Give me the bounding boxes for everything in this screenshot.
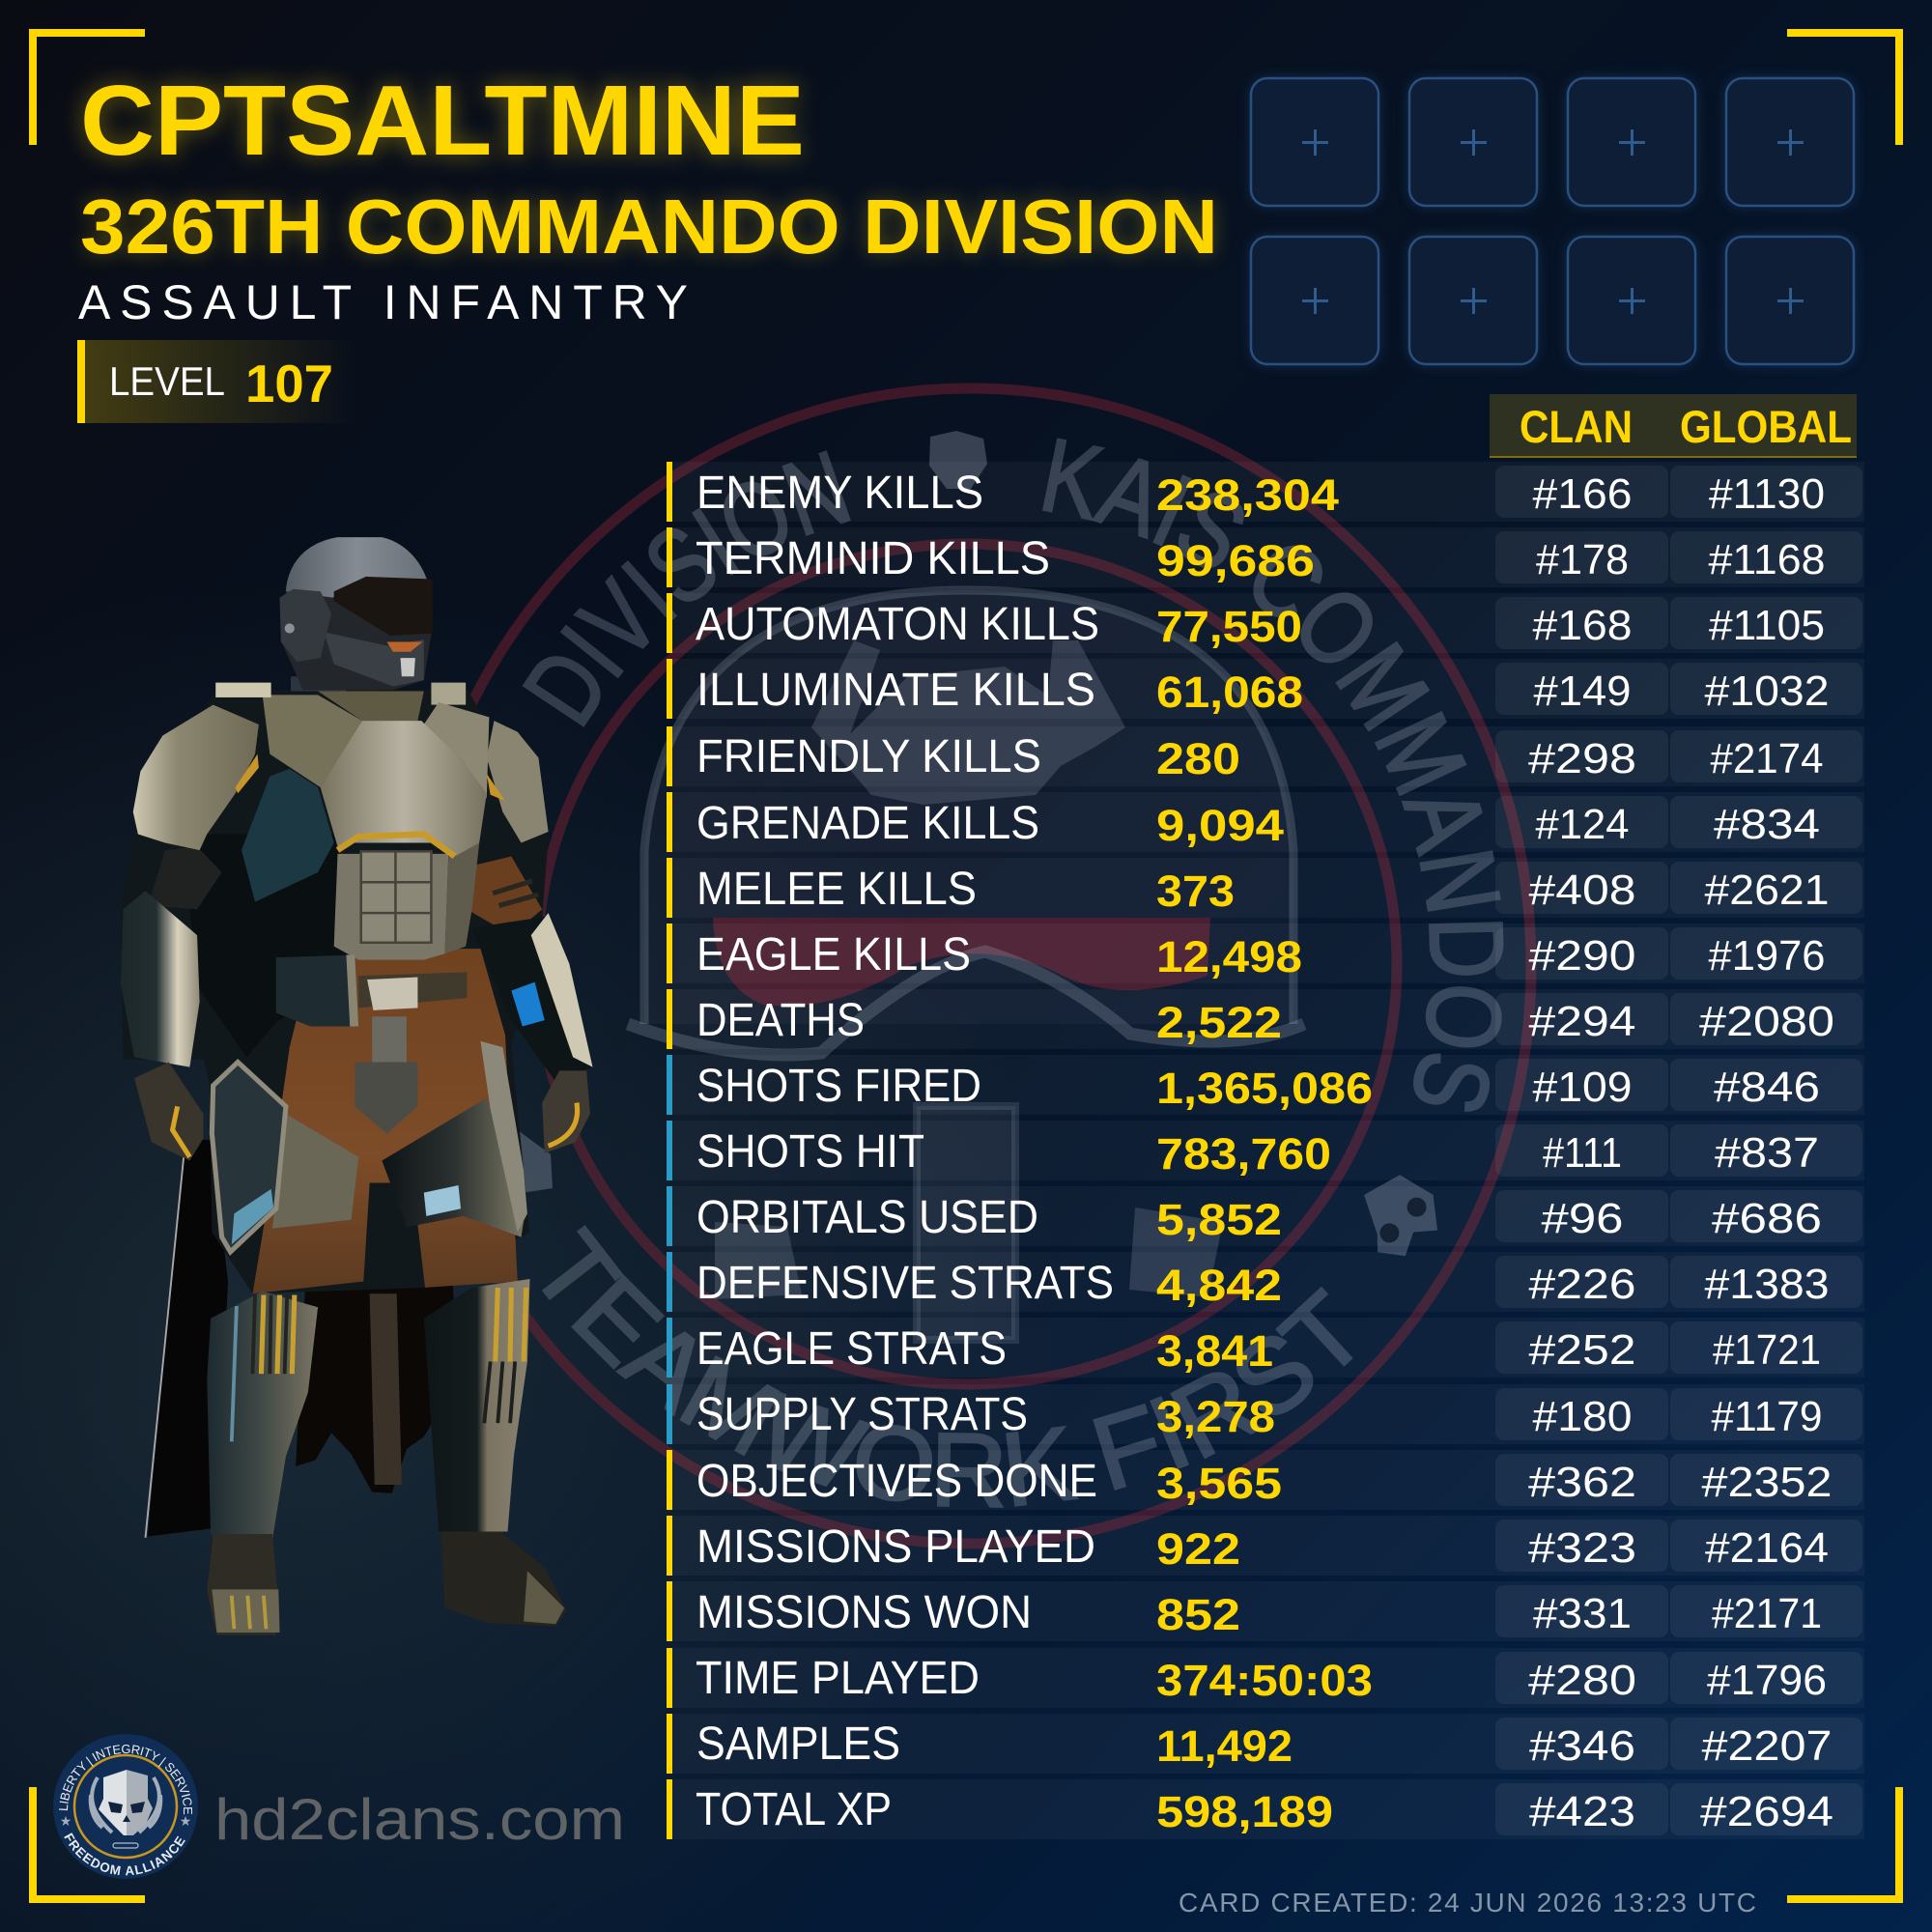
row: shots fired: #109 [1532,1064,1633,1111]
table header: rank columns: CLAN [1520,401,1633,452]
row: total xp: #2694 [1700,1788,1833,1835]
watermark emblem: clan patch [470,383,1536,1549]
row: time played [667,1648,1864,1708]
row: defensive strats [667,1252,1864,1312]
left arm [121,846,222,1161]
row: defensive strats: 4,842 [1156,1261,1282,1310]
logo name: FREEDOM ALLIANCE [64,1833,185,1876]
row: shots hit: SHOTS HIT [696,1126,924,1178]
right boot [441,1531,567,1627]
row: melee kills [667,858,1864,918]
row: orbitals used: #96 [1542,1195,1623,1242]
row: deaths: #294 [1528,998,1636,1045]
level badge [77,340,357,423]
row: deaths [667,989,1864,1049]
row: shots fired: 1,365,086 [1156,1064,1373,1113]
left thigh armor [212,1062,358,1252]
row: grenade kills: #124 [1536,801,1629,848]
row: shots hit: #111 [1543,1129,1622,1177]
row: enemy kills: ENEMY KILLS [696,468,983,519]
row: supply strats: #1179 [1712,1393,1822,1440]
body silhouette base [121,690,549,1293]
row: objectives done [667,1450,1864,1510]
row: shots hit: #837 [1715,1129,1819,1177]
row: missions played [667,1516,1864,1576]
row: missions played: MISSIONS PLAYED [696,1521,1095,1573]
logo motto: LIBERTY | INTEGRITY | SERVICE [59,1745,192,1814]
row: eagle strats: #252 [1528,1326,1636,1374]
row: total xp [667,1779,1864,1839]
row: melee kills: #2621 [1704,867,1830,914]
row: total xp: 598,189 [1156,1787,1333,1836]
table header: rank columns [1490,394,1857,458]
row: missions played: #323 [1528,1524,1636,1572]
row: supply strats [667,1384,1864,1444]
slot 1 [1251,78,1378,206]
row: missions won [667,1581,1864,1641]
row: orbitals used [667,1186,1864,1246]
helmet [280,537,433,692]
level badge: 107 [245,354,333,413]
row: samples: SAMPLES [696,1719,900,1770]
row: illuminate kills: #149 [1534,668,1631,715]
logo star right: ★ [180,1813,191,1829]
row: eagle strats: EAGLE STRATS [696,1323,1007,1375]
slot 5 [1251,237,1378,364]
cape [146,1140,458,1538]
row: friendly kills: #298 [1528,735,1636,782]
row: terminid kills [667,527,1864,587]
row: orbitals used: #686 [1712,1195,1822,1242]
row: deaths: 2,522 [1156,998,1282,1047]
watermark emblem: clan patch: TEAMWORK FIRST [542,1225,1352,1508]
row: samples [667,1714,1864,1774]
row: time played: #280 [1528,1657,1636,1704]
row: samples: #2207 [1702,1722,1832,1770]
slot 3 [1568,78,1695,206]
row: terminid kills: #1168 [1708,536,1826,583]
row: melee kills: #408 [1528,867,1636,914]
corner bracket: top right [1787,29,1903,145]
right arm [467,856,593,1153]
row: objectives done: OBJECTIVES DONE [696,1456,1097,1507]
row: orbitals used: 5,852 [1156,1195,1282,1244]
row: melee kills: 373 [1156,867,1235,916]
row: automaton kills: #168 [1532,602,1633,649]
belt with pouch and buckle [276,955,467,1026]
logo skull [99,1770,153,1835]
row: enemy kills: #1130 [1709,470,1825,518]
slot 8 [1726,237,1854,364]
watermark emblem: clan patch: KAIS COMMANDOS [1042,439,1503,1112]
website url: hd2clans.com [214,1787,625,1852]
row: eagle kills: EAGLE KILLS [696,929,971,980]
shoulder armor left [133,705,259,850]
watermark emblem: clan patch: DIVISION [522,450,851,727]
row: automaton kills [667,593,1864,653]
row: shots fired: #846 [1714,1064,1820,1111]
row: time played: TIME PLAYED [696,1653,980,1704]
slots grid: empty loadout slots [1251,78,1854,364]
corner bracket: bottom left [29,1787,145,1903]
row: illuminate kills [667,659,1864,719]
row: terminid kills: #178 [1536,536,1629,583]
slot 6 [1409,237,1537,364]
row: samples: 11,492 [1156,1721,1293,1771]
row: missions won: MISSIONS WON [696,1587,1032,1638]
row: friendly kills: 280 [1156,734,1240,783]
row: samples: #346 [1529,1722,1635,1770]
row: friendly kills: FRIENDLY KILLS [696,731,1041,782]
row: deaths: #2080 [1699,998,1834,1045]
row: terminid kills: TERMINID KILLS [696,533,1050,584]
row: automaton kills: AUTOMATON KILLS [696,599,1099,650]
row: grenade kills: GRENADE KILLS [696,798,1039,849]
slot 2 [1409,78,1537,206]
left shin guard [207,1292,318,1540]
row: grenade kills: #834 [1714,801,1820,848]
row: defensive strats: #1383 [1704,1261,1830,1308]
row: eagle strats [667,1318,1864,1378]
row: orbitals used: ORBITALS USED [696,1192,1038,1243]
chest armor [215,683,489,960]
row: supply strats: 3,278 [1156,1392,1275,1441]
row: eagle strats: #1721 [1713,1326,1821,1374]
row: shots fired [667,1055,1864,1115]
shoulder armor right [487,721,549,842]
row: eagle kills: #1976 [1708,932,1826,980]
row: melee kills: MELEE KILLS [696,864,977,915]
row: enemy kills [667,462,1864,522]
corner bracket: top left [29,29,145,145]
row: terminid kills: 99,686 [1156,536,1315,585]
row: total xp: #423 [1529,1788,1635,1835]
groin plate [355,1016,417,1133]
row: supply strats: #180 [1532,1393,1633,1440]
slot 4 [1726,78,1854,206]
subheading: role: ASSAULT INFANTRY [78,275,688,329]
row: missions won: #2171 [1712,1590,1822,1637]
row: grenade kills [667,792,1864,852]
row: enemy kills: #166 [1532,470,1633,518]
level badge: LEVEL [109,358,225,404]
row: grenade kills: 9,094 [1156,801,1284,850]
row: illuminate kills: 61,068 [1156,668,1303,717]
row: eagle kills: 12,498 [1156,932,1302,981]
row: eagle kills: #290 [1528,932,1636,980]
row: friendly kills [667,726,1864,786]
legs and pelvis cloth [252,949,518,1293]
title: player name: CPTSALTMINE [80,65,805,176]
row: missions played: #2164 [1705,1524,1829,1572]
logo laurels [91,1777,160,1833]
row: friendly kills: #2174 [1710,735,1824,782]
row: objectives done: #2352 [1702,1459,1832,1506]
row: eagle kills [667,923,1864,983]
row: automaton kills: #1105 [1709,602,1825,649]
row: shots hit: 783,760 [1156,1129,1331,1179]
right shin guard [424,1279,529,1531]
torso underlayer [183,835,352,1057]
heading: division: 326TH COMMANDO DIVISION [80,184,1218,270]
row: shots hit [667,1121,1864,1180]
row: defensive strats: DEFENSIVE STRATS [696,1258,1114,1309]
corner bracket: bottom right [1787,1787,1903,1903]
row: objectives done: #362 [1528,1459,1636,1506]
row: time played: #1796 [1707,1657,1827,1704]
row: eagle strats: 3,841 [1156,1326,1273,1376]
table header: rank columns: GLOBAL [1680,401,1852,452]
left boot [207,1534,280,1635]
row: illuminate kills: ILLUMINATE KILLS [696,665,1095,716]
row: shots fired: SHOTS FIRED [696,1061,981,1112]
logo chain [113,1843,138,1848]
row: objectives done: 3,565 [1156,1459,1282,1508]
row: missions won: #331 [1533,1590,1632,1637]
row: deaths: DEATHS [696,995,865,1046]
row: illuminate kills: #1032 [1704,668,1830,715]
row: defensive strats: #226 [1528,1261,1636,1308]
row: missions won: 852 [1156,1590,1240,1639]
row: automaton kills: 77,550 [1156,602,1302,651]
row: time played: 374:50:03 [1156,1656,1373,1705]
logo: freedom alliance badge [53,1734,198,1879]
slot 7 [1568,237,1695,364]
right thigh armor [382,1041,527,1237]
stats table [667,462,1864,1839]
character: armored helldiver figure [121,537,593,1635]
row: supply strats: SUPPLY STRATS [696,1389,1028,1440]
logo stars: ★ [60,1813,71,1829]
card creation timestamp: CARD CREATED: 24 JUN 2026 13:23 UTC [1179,1888,1756,1918]
row: enemy kills: 238,304 [1156,470,1339,520]
row: total xp: TOTAL XP [696,1784,892,1835]
row: missions played: 922 [1156,1524,1240,1574]
